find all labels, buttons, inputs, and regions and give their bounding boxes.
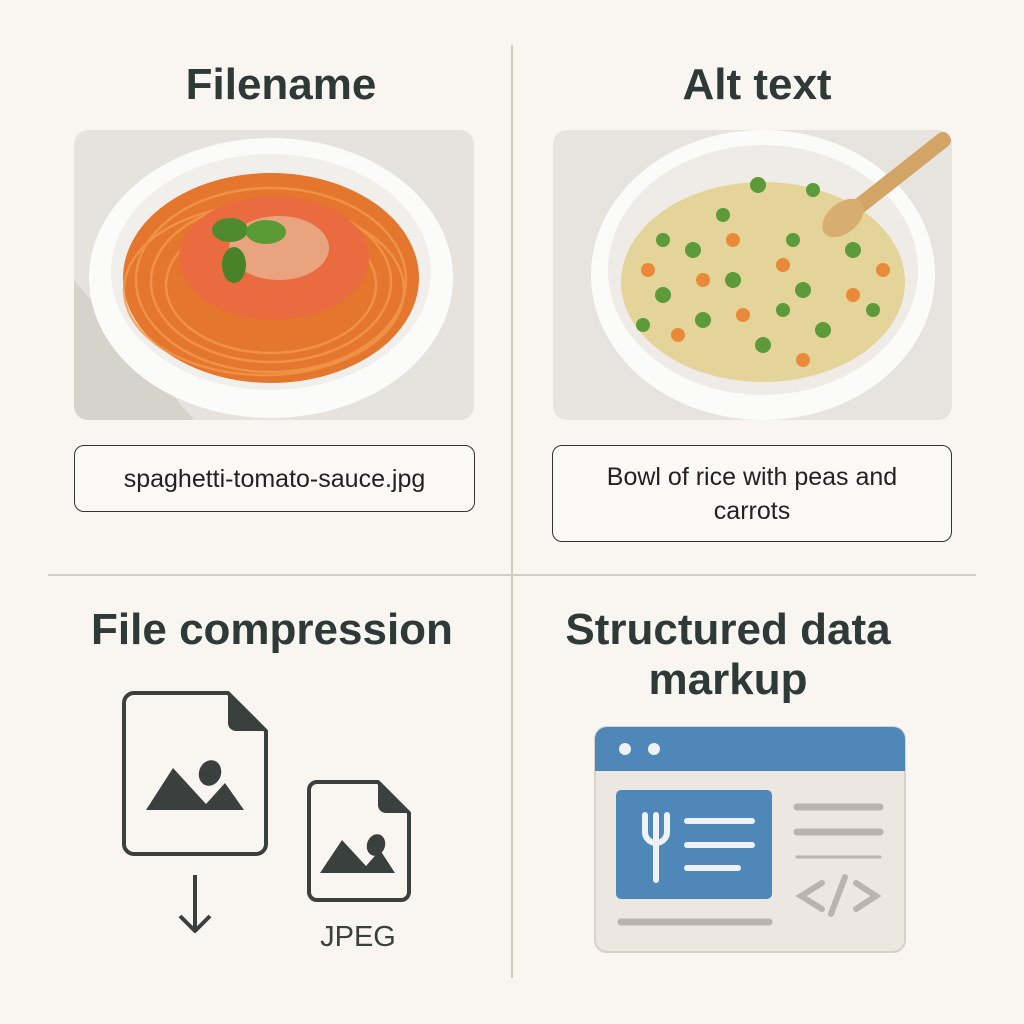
photo: rice bowl xyxy=(553,130,952,420)
label: alt text: Bowl of rice with peas and xyxy=(607,462,897,490)
icon: browser structured data xyxy=(594,726,906,953)
label: filename: spaghetti-tomato-sauce.jpg xyxy=(124,464,425,492)
photo: spaghetti xyxy=(74,130,474,420)
icon: file compression xyxy=(122,691,411,950)
label: alt text xyxy=(552,445,952,542)
title: Structured data markup xyxy=(565,605,891,704)
title: Filename: Filename xyxy=(186,60,376,109)
title: File compression: File compression xyxy=(91,605,453,654)
title: Alt text: Alt text xyxy=(682,60,832,109)
title: Structured data markup: Structured data xyxy=(565,605,891,654)
title: Structured data markup: markup xyxy=(649,655,807,704)
label: alt text: carrots xyxy=(714,496,790,524)
label: filename xyxy=(74,445,475,512)
